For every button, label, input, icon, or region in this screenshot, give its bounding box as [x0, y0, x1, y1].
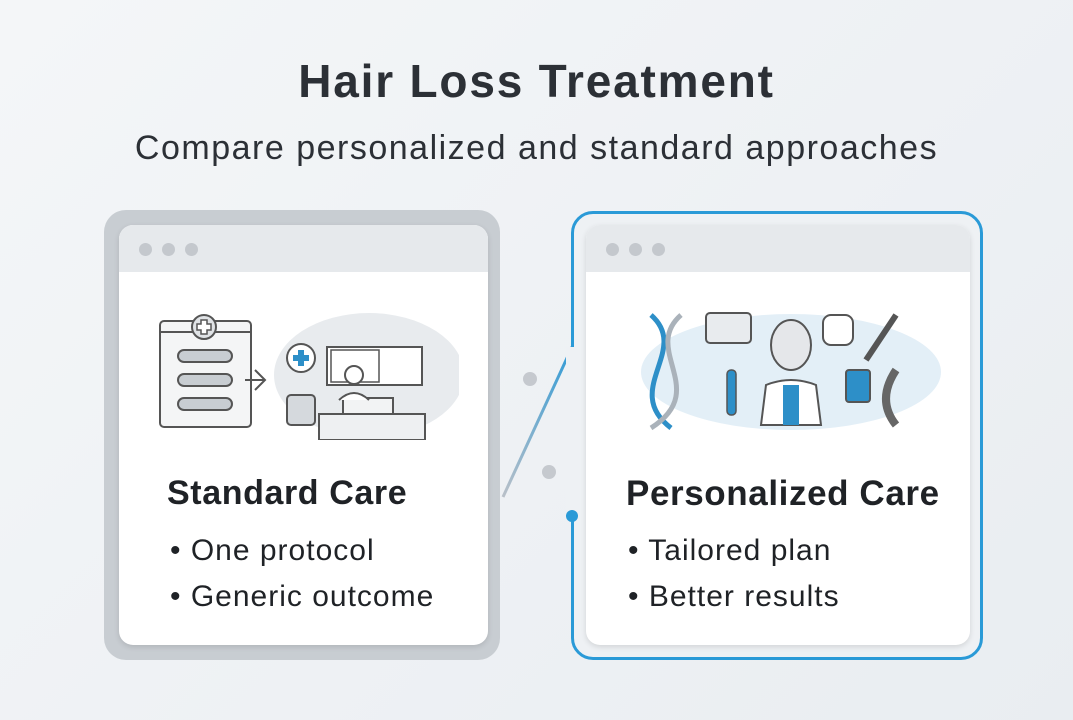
connector gap + dot [566, 347, 578, 515]
illustration: clinic [159, 313, 459, 440]
window bar [586, 225, 970, 272]
title: Hair Loss Treatment [298, 55, 775, 107]
panel: standard care [104, 210, 500, 660]
bullet list: • Tailored plan [628, 534, 831, 567]
bullet list: • Better results [628, 580, 840, 613]
bullet list: • One protocol [170, 534, 375, 567]
bullet list: • Generic outcome [170, 580, 434, 613]
illustration: doctor dna [641, 312, 941, 430]
bullet list [170, 534, 434, 613]
subtitle: Compare personalized and standard approaches [135, 129, 938, 167]
window bar [119, 225, 488, 272]
bullet list [628, 534, 840, 613]
panel: personalized care [571, 211, 983, 660]
heading: Standard Care [167, 474, 407, 512]
connector [502, 346, 571, 498]
heading: Personalized Care [626, 474, 940, 513]
